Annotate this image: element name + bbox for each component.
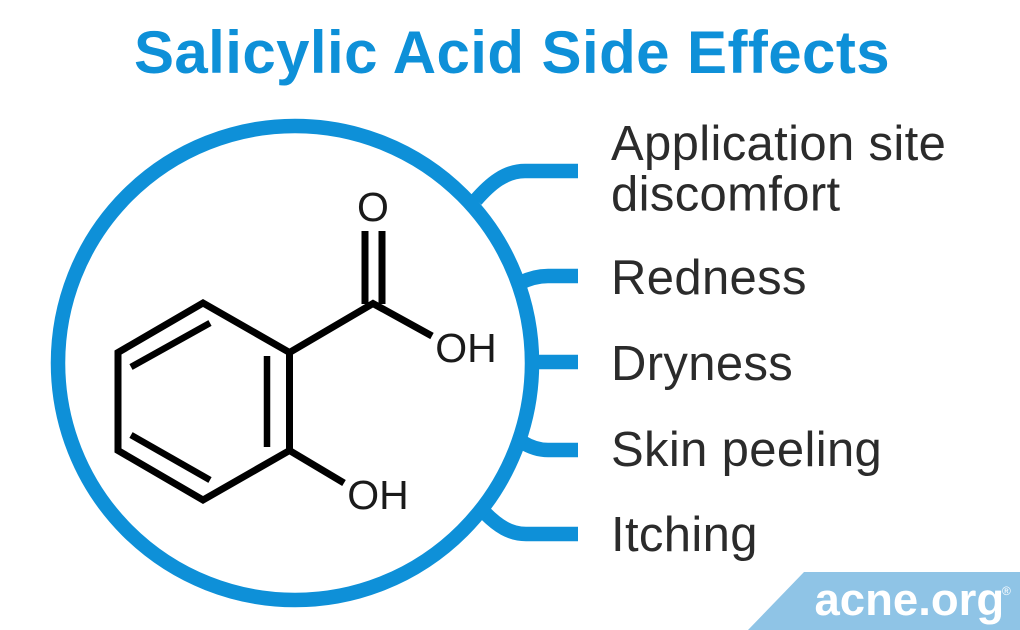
labels bbox=[611, 117, 946, 562]
molecule: salicylic acid: OH bbox=[347, 472, 409, 518]
logo banner: acne.org bbox=[814, 574, 1004, 625]
label: skin peeling: Skin peeling bbox=[611, 423, 882, 477]
molecule: salicylic acid: OH bbox=[435, 325, 497, 371]
label: dryness: Dryness bbox=[611, 337, 793, 391]
logo banner bbox=[748, 572, 1020, 630]
label: application site discomfort: Application site bbox=[611, 117, 946, 171]
label: redness: Redness bbox=[611, 251, 807, 305]
molecule: salicylic acid: O bbox=[357, 184, 389, 230]
title: Salicylic Acid Side Effects bbox=[134, 19, 890, 86]
label: application site discomfort: discomfort bbox=[611, 168, 841, 222]
large circle bbox=[58, 126, 532, 600]
connectors: circle to labels bbox=[476, 171, 578, 534]
logo banner: ® bbox=[1002, 584, 1011, 598]
molecule: salicylic acid bbox=[118, 184, 497, 518]
label: itching: Itching bbox=[611, 508, 758, 562]
